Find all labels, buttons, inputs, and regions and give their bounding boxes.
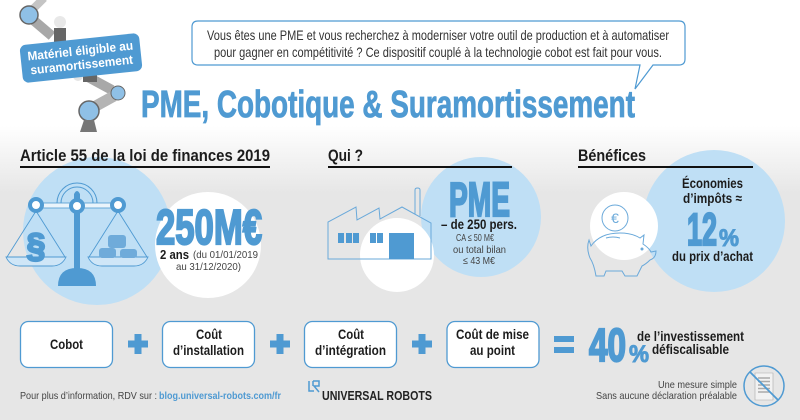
text: du prix d'achat: du prix d’achat [672, 248, 753, 264]
text: de l'investissement défiscalisable [637, 328, 744, 357]
box: coût d'installation: Coût [196, 326, 222, 342]
icon: piggy bank: € [611, 210, 619, 226]
icon: plus [128, 334, 148, 354]
text: économies d'impôts: Économies [682, 175, 743, 191]
text: durée: (du 01/01/2019 [193, 249, 258, 261]
badge: matériel éligible: suramortissement [30, 53, 134, 77]
icon: no document [744, 366, 784, 406]
heading: bénéfices: Bénéfices [578, 146, 646, 165]
robot arm illustration [20, 0, 125, 132]
box: coût d'installation [162, 322, 254, 368]
box: cobot [20, 322, 112, 368]
footer link text: blog.universal-robots.com/fr [159, 390, 281, 402]
text: critères PME: ≤ 43 M€ [463, 255, 495, 267]
text: critères PME: ou total bilan [453, 244, 506, 256]
footer link text: Pour plus d’information, RDV sur : [20, 390, 157, 402]
text: de l'investissement défiscalisable: de l’investissement [637, 328, 744, 344]
box: coût d'intégration [304, 322, 396, 368]
box: coût de mise au point: au point [470, 342, 515, 358]
text: durée: 2 ans [160, 247, 189, 262]
box: coût d'intégration: Coût [338, 326, 364, 342]
footer link text [20, 390, 281, 402]
heading: article 55: Article 55 de la loi de finances 2019 [20, 146, 270, 165]
speech bubble intro: Vous êtes une PME et vous recherchez à moderniser votre outil de production et à automatiser [207, 27, 669, 43]
text: économies d'impôts [682, 175, 743, 206]
box: cobot: Cobot [50, 336, 83, 352]
badge: matériel éligible [19, 33, 143, 83]
stat: 12 %: % [719, 225, 739, 252]
text: une mesure simple [596, 379, 737, 402]
stat: 12 %: 12 [687, 204, 717, 255]
box: coût de mise au point [447, 322, 539, 368]
icon: equals [554, 336, 574, 353]
box: coût de mise au point: Coût de mise [456, 326, 529, 342]
icon: plus [412, 334, 432, 354]
box: coût d'intégration: d’intégration [315, 342, 386, 358]
speech bubble intro: pour gagner en compétitivité ? Ce dispositif couplé à la technologie cobot est fait pour vous. [214, 44, 662, 60]
text: critères PME: CA ≤ 50 M€ [456, 232, 494, 244]
text: critères PME [441, 216, 517, 267]
icon: balance scale: § [27, 227, 45, 265]
text: de l'investissement défiscalisable: défiscalisable [652, 341, 729, 357]
icon: factory [328, 188, 431, 259]
text: une mesure simple: Une mesure simple [658, 379, 737, 391]
panel: article 55 [6, 146, 270, 305]
panel: qui [328, 146, 541, 292]
stat: 250 M€: 250M€ [156, 201, 262, 255]
text: critères PME: – de 250 pers. [441, 216, 517, 232]
text: une mesure simple: Sans aucune déclaration préalable [596, 390, 737, 402]
logo: universal robots: UNIVERSAL ROBOTS [322, 389, 432, 403]
heading: qui: Qui ? [328, 146, 363, 165]
icon: plus [270, 334, 290, 354]
box: coût d'installation: d’installation [173, 342, 244, 358]
panel: bénéfices [578, 146, 785, 292]
stat: 40 %: % [629, 341, 649, 368]
stat: PME: PME [449, 174, 510, 227]
text: économies d'impôts: d’impôts ≈ [683, 190, 742, 206]
icon: balance scale [6, 183, 148, 286]
stat: 40 %: 40 [589, 319, 626, 371]
text: durée: au 31/12/2020) [176, 261, 241, 273]
badge: matériel éligible: Matériel éligible au [27, 39, 134, 64]
speech bubble intro [192, 21, 685, 89]
logo: universal robots [309, 381, 432, 403]
title: PME, Cobotique & Suramortissement [141, 84, 635, 126]
icon: piggy bank [588, 205, 656, 276]
text: durée [160, 247, 258, 273]
